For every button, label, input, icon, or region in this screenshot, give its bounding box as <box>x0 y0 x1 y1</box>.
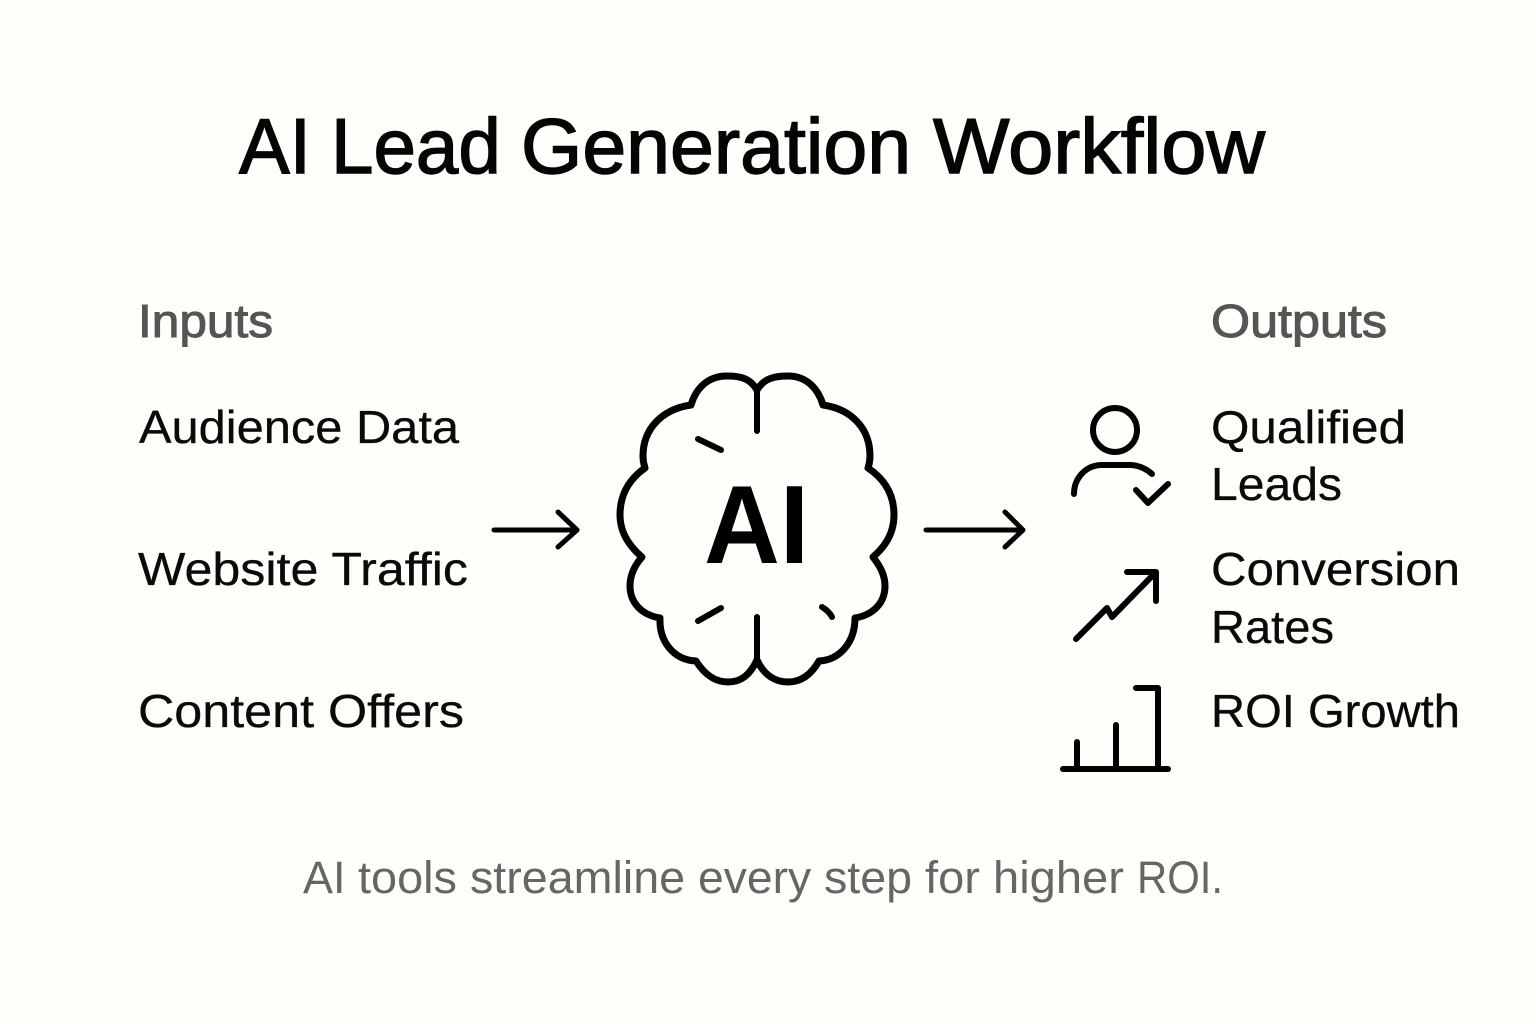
panel: inputs <box>138 295 468 737</box>
panel: outputs <box>1063 295 1460 769</box>
title: Workflow <box>933 102 1266 190</box>
label: qualified leads: Leads <box>1211 458 1342 510</box>
title: AI <box>239 102 332 190</box>
arrow: inputs to AI <box>494 512 577 547</box>
footer caption: higher <box>993 852 1137 903</box>
label: conversion rates: Conversion <box>1211 543 1460 595</box>
footer caption: step <box>824 852 925 903</box>
footer caption: tools <box>358 852 470 903</box>
icon: bar chart <box>1063 688 1168 769</box>
arrow: AI to outputs <box>926 512 1023 547</box>
brain outline <box>620 376 894 682</box>
icon: AI brain <box>620 376 894 682</box>
input: website traffic: Website Traffic <box>138 543 468 595</box>
icon: trending arrow <box>1076 572 1156 639</box>
output: ROI growth <box>1063 685 1460 769</box>
brain detail marks <box>698 439 832 621</box>
input: content offers: Content Offers <box>138 685 464 737</box>
title: Generation <box>521 102 933 190</box>
footer caption: streamline <box>470 852 698 903</box>
AI label: AI <box>704 463 809 587</box>
label: ROI growth: ROI Growth <box>1211 685 1460 737</box>
label: conversion rates: Rates <box>1211 601 1334 653</box>
outputs heading: Outputs <box>1211 295 1387 347</box>
input: audience data: Audience Data <box>139 401 459 453</box>
footer caption: AI <box>303 852 358 903</box>
footer caption: ROI. <box>1137 852 1223 903</box>
inputs heading: Inputs <box>138 295 273 347</box>
label: qualified leads: Qualified <box>1211 401 1406 453</box>
output: conversion rates <box>1076 543 1460 653</box>
output: qualified leads <box>1074 401 1406 510</box>
footer caption: for <box>925 852 993 903</box>
icon: person with check <box>1074 408 1168 503</box>
title: Lead <box>331 102 522 190</box>
footer caption: every <box>698 852 824 903</box>
brain center folds <box>754 390 760 660</box>
